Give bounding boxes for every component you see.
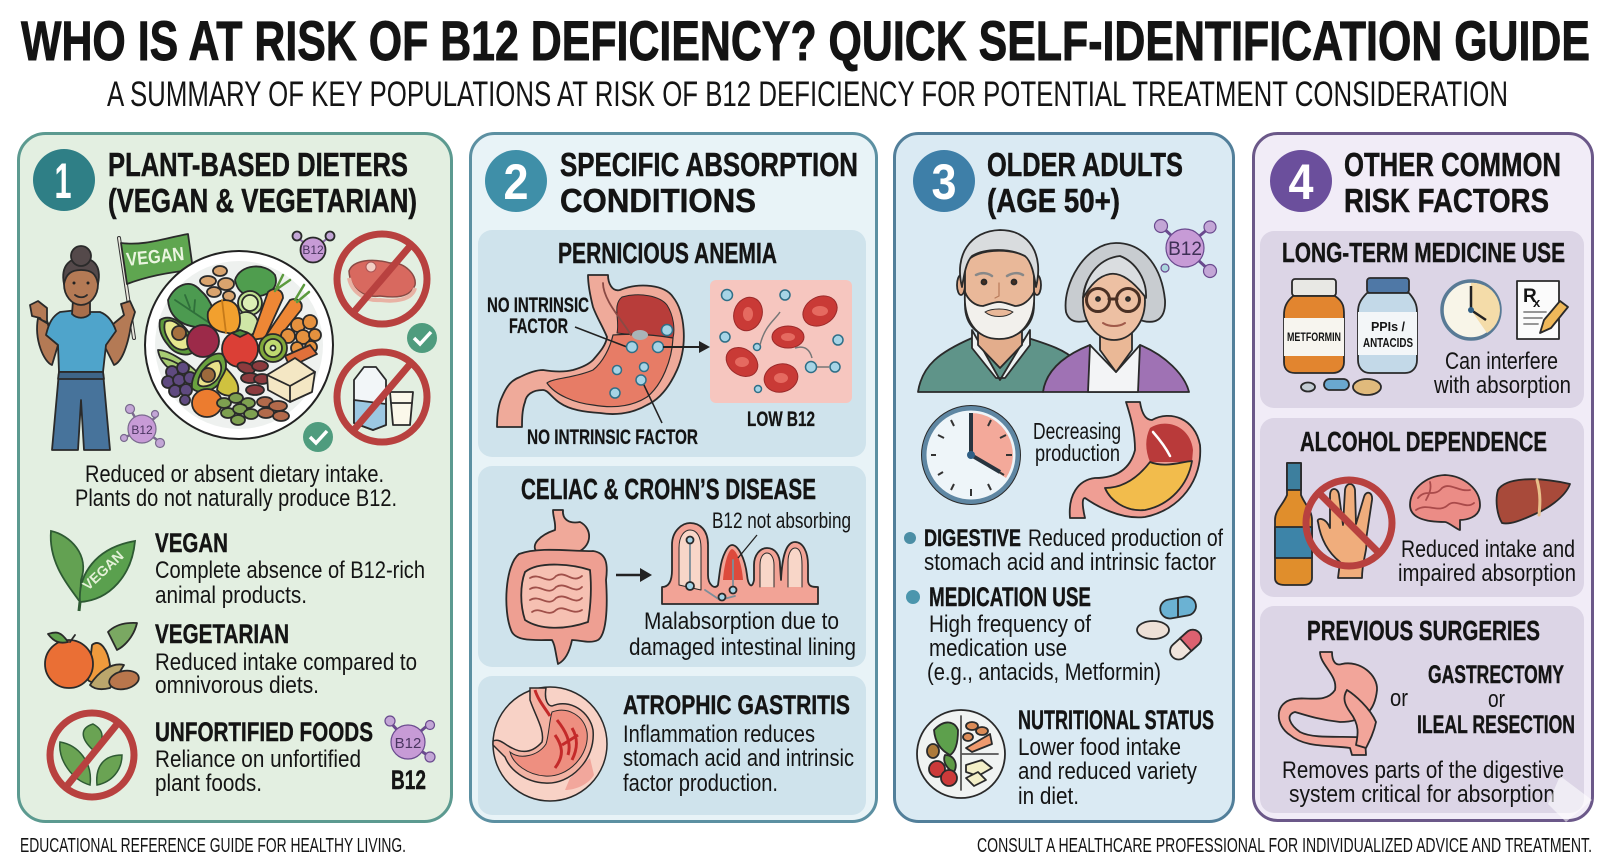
icon: B12 molecule lower: B12 xyxy=(131,423,153,437)
icon: person with vegan flag xyxy=(30,234,193,450)
text: reduced intake: impaired absorption xyxy=(1398,560,1576,587)
text block: nutritional status: NUTRITIONAL STATUS xyxy=(1018,705,1214,735)
text block: medication use xyxy=(906,582,1161,686)
text block: atrophic gastritis: stomach acid and intrinsic xyxy=(623,745,854,772)
label: no intrinsic factor bottom: NO INTRINSIC FACTOR xyxy=(527,426,698,449)
icon: liver xyxy=(1497,479,1570,523)
text block: unfortified foods: Reliance on unfortified xyxy=(155,746,361,773)
heading: other common risk factors: RISK FACTORS xyxy=(1344,182,1549,219)
number badge 3 xyxy=(913,150,975,212)
icon: B12 molecule lower xyxy=(120,404,164,448)
icon: check mark two xyxy=(303,422,333,452)
footer left: EDUCATIONAL REFERENCE GUIDE FOR HEALTHY LIVING. xyxy=(20,835,406,857)
text block: nutritional status: in diet. xyxy=(1018,783,1079,810)
text block: unfortified foods: UNFORTIFIED FOODS xyxy=(155,717,373,747)
illustration: older man xyxy=(918,230,1075,392)
text block: atrophic gastritis xyxy=(623,690,854,797)
illustration: stomach xyxy=(497,275,684,427)
heading: older adults: OLDER ADULTS xyxy=(987,146,1183,183)
text block: nutritional status xyxy=(1018,705,1214,810)
text block: nutritional status: Lower food intake xyxy=(1018,734,1181,761)
heading: plant-based dieters xyxy=(108,146,417,219)
icon: apple, carrot and almond xyxy=(45,623,141,692)
number badge 4 xyxy=(1270,150,1332,212)
icon: B12 molecule xyxy=(1154,220,1216,278)
sub-panel: alcohol dependence xyxy=(1260,418,1584,597)
label: no intrinsic factor left: FACTOR xyxy=(509,315,568,338)
label: no intrinsic factor left xyxy=(487,294,627,347)
icon: no meat xyxy=(337,234,427,324)
sub-panel: pernicious anemia xyxy=(478,230,866,457)
text block: digestive: DIGESTIVE xyxy=(924,525,1021,552)
text: can interfere: Can interfere xyxy=(1445,348,1558,375)
number badge 2: 2 xyxy=(504,154,528,210)
icon: divided food plate xyxy=(917,710,1005,798)
text: dietary intake summary: Reduced or absent dietary intake. xyxy=(85,461,384,488)
icon: prescription and pencil: x xyxy=(1533,295,1541,310)
icon: metformin bottle xyxy=(1284,279,1344,373)
text: can interfere: with absorption xyxy=(1433,372,1571,399)
text block: digestive: stomach acid and intrinsic factor xyxy=(924,549,1216,576)
icon: person with vegan flag: VEGAN xyxy=(125,244,185,271)
text block: vegan: Complete absence of B12-rich xyxy=(155,557,425,584)
icon: bottle xyxy=(1275,463,1312,585)
number badge 1: 1 xyxy=(54,153,72,209)
icon: brain xyxy=(1410,475,1480,530)
text: reduced intake: Reduced intake and xyxy=(1401,536,1575,563)
icon: hand with no sign xyxy=(1306,480,1392,578)
icon: PPIs bottle: ANTACIDS xyxy=(1363,336,1413,350)
text block: digestive: Reduced production of xyxy=(1028,525,1223,552)
illustration: digestive tract xyxy=(506,510,607,664)
icon: metformin bottle: METFORMIN xyxy=(1287,332,1341,344)
icon: check mark one xyxy=(407,323,437,353)
sub-panel: long-term medicine use xyxy=(1260,231,1584,408)
text block: vegetarian: VEGETARIAN xyxy=(155,619,289,649)
text: can interfere xyxy=(1433,348,1571,399)
heading: plant-based dieters: PLANT-BASED DIETERS xyxy=(108,146,408,183)
text: malabsorption xyxy=(629,608,856,661)
heading: plant-based dieters: (VEGAN & VEGETARIAN) xyxy=(108,182,417,219)
chart: plate of plant foods xyxy=(145,251,333,439)
icon: B12 molecule top xyxy=(292,232,334,262)
text block: nutritional status: and reduced variety xyxy=(1018,758,1197,785)
icon: no plant foods xyxy=(50,713,134,797)
illustration: older woman xyxy=(1043,243,1189,392)
heading: specific absorption conditions: CONDITIONS xyxy=(560,182,756,219)
text block: vegetarian xyxy=(155,619,417,699)
illustration: stomach with reduced acid xyxy=(1070,402,1200,518)
text block: medication use: medication use xyxy=(929,635,1067,662)
panel: plant-based dieters xyxy=(18,134,452,822)
icon: prescription and pencil xyxy=(1517,281,1568,339)
heading: older adults xyxy=(987,146,1183,219)
illustration: low B12 blood cells xyxy=(710,280,852,403)
panel: specific absorption conditions xyxy=(470,134,876,822)
text: removes parts xyxy=(1282,757,1564,808)
text block: vegan: animal products. xyxy=(155,582,307,609)
icon: loose pills xyxy=(1301,379,1381,395)
text: gastrectomy or ileal resection: or xyxy=(1488,686,1505,713)
text: reduced intake xyxy=(1398,536,1576,587)
icon: prescription and pencil: R xyxy=(1523,286,1537,307)
illustration: altered stomach xyxy=(1279,652,1377,755)
number badge 1 xyxy=(33,149,95,211)
illustration: damaged villi xyxy=(662,523,818,604)
text: or: or xyxy=(1390,685,1408,712)
B12 dots in stomach xyxy=(610,324,672,398)
arrow to blood cells xyxy=(663,341,710,353)
text block: atrophic gastritis: ATROPHIC GASTRITIS xyxy=(623,690,850,720)
text: dietary intake summary xyxy=(75,461,397,512)
panel: other common risk factors xyxy=(1254,134,1592,822)
panel: older adults xyxy=(894,134,1234,822)
label: B12 not absorbing: B12 not absorbing xyxy=(712,508,851,533)
text block: medication use: High frequency of xyxy=(929,611,1091,638)
text block: digestive xyxy=(904,525,1223,576)
number badge 2 xyxy=(485,150,547,212)
icon: clock xyxy=(1442,281,1500,339)
icon: PPIs bottle xyxy=(1358,278,1417,373)
icon: B12 molecule with label xyxy=(385,716,435,795)
text block: vegetarian: Reduced intake compared to xyxy=(155,649,417,676)
text: removes parts: system critical for absorption xyxy=(1289,781,1555,808)
text: malabsorption: Malabsorption due to xyxy=(644,608,839,635)
icon: B12 molecule with label: B12 xyxy=(395,735,421,752)
text block: vegan xyxy=(155,528,425,609)
text block: vegetarian: omnivorous diets. xyxy=(155,672,319,699)
label: low B12: LOW B12 xyxy=(747,408,815,431)
label: B12 not absorbing xyxy=(712,508,851,558)
heading: specific absorption conditions: SPECIFIC ABSORPTION xyxy=(560,146,858,183)
text block: medication use: (e.g., antacids, Metformin) xyxy=(927,659,1161,686)
icon: vegan leaf: VEGAN xyxy=(79,547,127,593)
icon: vegan leaf xyxy=(51,531,135,611)
heading: specific absorption conditions xyxy=(560,146,858,219)
heading: older adults: (AGE 50+) xyxy=(987,182,1120,219)
sub-panel: celiac and crohn's disease xyxy=(478,466,866,667)
text block: atrophic gastritis: Inflammation reduces xyxy=(623,721,815,748)
illustration: inflamed stomach lining xyxy=(493,687,607,801)
icon: PPIs bottle: PPIs / xyxy=(1371,320,1406,334)
icon: B12 molecule top: B12 xyxy=(302,243,324,257)
text block: atrophic gastritis: factor production. xyxy=(623,770,778,797)
sub-panel: previous surgeries xyxy=(1260,606,1584,813)
label: no intrinsic factor left: NO INTRINSIC xyxy=(487,294,589,317)
text: gastrectomy or ileal resection xyxy=(1417,661,1575,739)
number badge 4: 4 xyxy=(1288,154,1314,210)
icon: B12 molecule with label: B12 xyxy=(391,765,426,795)
number badge 3: 3 xyxy=(932,154,956,210)
text block: medication use: MEDICATION USE xyxy=(929,582,1091,612)
text: decreasing production: production xyxy=(1035,440,1120,466)
text block: unfortified foods: plant foods. xyxy=(155,770,262,797)
heading: celiac and crohn's: CELIAC & CROHN’S DISEASE xyxy=(521,474,816,506)
text block: unfortified foods xyxy=(155,717,373,797)
text block: vegan: VEGAN xyxy=(155,528,228,558)
icon: B12 molecule: B12 xyxy=(1168,239,1202,260)
icon: pills xyxy=(1137,595,1205,663)
text: dietary intake summary: Plants do not naturally produce B12. xyxy=(75,485,397,512)
text: decreasing production xyxy=(1033,418,1121,466)
text: removes parts: Removes parts of the digestive xyxy=(1282,757,1564,784)
icon: no dairy xyxy=(337,352,427,442)
text: malabsorption: damaged intestinal lining xyxy=(629,634,856,661)
text: decreasing production: Decreasing xyxy=(1033,418,1121,444)
heading: other common risk factors xyxy=(1344,146,1561,219)
sub-panel: atrophic gastritis xyxy=(478,676,866,815)
heading: pernicious anemia: PERNICIOUS ANEMIA xyxy=(558,238,777,270)
icon: clock xyxy=(922,406,1020,504)
arrow to villi xyxy=(616,568,652,582)
label: no intrinsic factor bottom xyxy=(527,383,698,449)
